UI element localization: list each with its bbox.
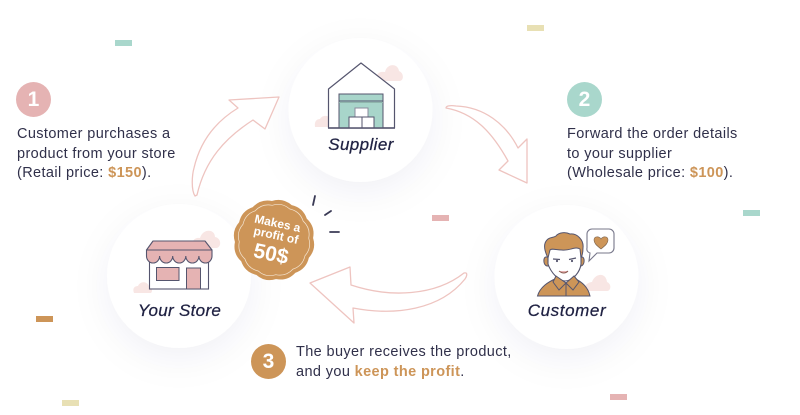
badge: makes a profit of 50$: 50$ [251, 239, 291, 269]
icon: store [133, 231, 220, 293]
icon: warehouse [315, 63, 403, 128]
step 1 text: Customer purchases a [17, 126, 170, 142]
badge: makes a profit of 50$: Makes a [253, 212, 302, 235]
step 3 text [296, 344, 512, 380]
step 3 number: 3 [263, 350, 274, 373]
step 3 number [251, 344, 286, 379]
node: store circle [107, 204, 251, 348]
arrow: customer to store [310, 267, 467, 323]
step 1 text [17, 126, 176, 181]
node: customer circle [494, 205, 638, 349]
label: Supplier: Supplier [328, 135, 395, 154]
step 1 number [16, 82, 51, 117]
arrow: store to supplier [192, 97, 279, 196]
step 1 number: 1 [28, 88, 39, 111]
label: Customer: Customer [528, 301, 607, 320]
step 2 number: 2 [579, 88, 590, 111]
step 3 text: and you keep the profit. [296, 364, 465, 380]
sparkle lines [313, 196, 339, 232]
step 2 number [567, 82, 602, 117]
badge: makes a profit of 50$ [226, 192, 322, 288]
step 1 text: (Retail price: $150). [17, 165, 152, 181]
step 3 text: The buyer receives the product, [296, 344, 512, 360]
step 2 text [567, 126, 738, 181]
step 2 text: Forward the order details [567, 126, 738, 142]
step 2 text: to your supplier [567, 146, 672, 162]
step 1 text: product from your store [17, 146, 176, 162]
icon: customer [538, 229, 614, 296]
label: Your Store: Your Store [138, 301, 221, 320]
step 2 text: (Wholesale price: $100). [567, 165, 733, 181]
node: supplier circle [288, 38, 432, 182]
badge: makes a profit of 50$: profit of [252, 224, 301, 247]
arrow: supplier to customer [446, 106, 527, 183]
